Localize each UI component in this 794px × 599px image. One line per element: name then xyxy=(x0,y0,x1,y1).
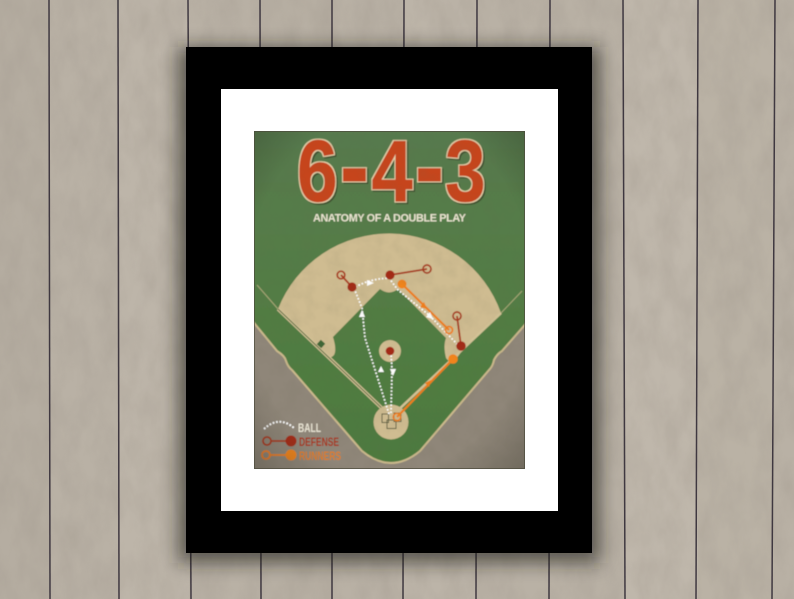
title: 6-4-3: 6 xyxy=(297,123,338,220)
legend: defense: DEFENSE xyxy=(299,437,339,449)
frame shadow xyxy=(178,47,600,563)
legend: runners: RUNNERS xyxy=(299,451,341,463)
home plate dirt circle xyxy=(374,404,408,440)
ball direction arrows xyxy=(359,280,433,376)
legend xyxy=(262,422,341,463)
title: 6-4-3: 3 xyxy=(445,123,486,220)
poster green background xyxy=(250,127,529,473)
batter's boxes and catcher's box xyxy=(382,413,401,428)
runners xyxy=(393,280,458,421)
third base coach box xyxy=(317,340,325,348)
infield dirt xyxy=(278,234,501,361)
foul lines xyxy=(257,285,522,414)
ball path xyxy=(354,278,458,414)
title: 6-4-3: - xyxy=(340,109,369,225)
pitcher's mound xyxy=(379,340,401,362)
legend: ball: BALL xyxy=(298,423,321,435)
runner direction arrows xyxy=(420,302,431,387)
subtitle: ANATOMY OF A DOUBLE PLAY xyxy=(313,212,467,224)
defense players xyxy=(337,265,466,355)
black picture frame xyxy=(186,47,592,553)
title: 6-4-3 xyxy=(298,138,486,206)
title: 6-4-3: 4 xyxy=(372,123,413,220)
title: 6-4-3: - xyxy=(415,109,444,225)
runner paths xyxy=(397,284,453,417)
white mat xyxy=(221,89,558,511)
poster xyxy=(254,131,525,469)
foul territory grey xyxy=(250,318,530,474)
defense paths xyxy=(341,269,461,346)
